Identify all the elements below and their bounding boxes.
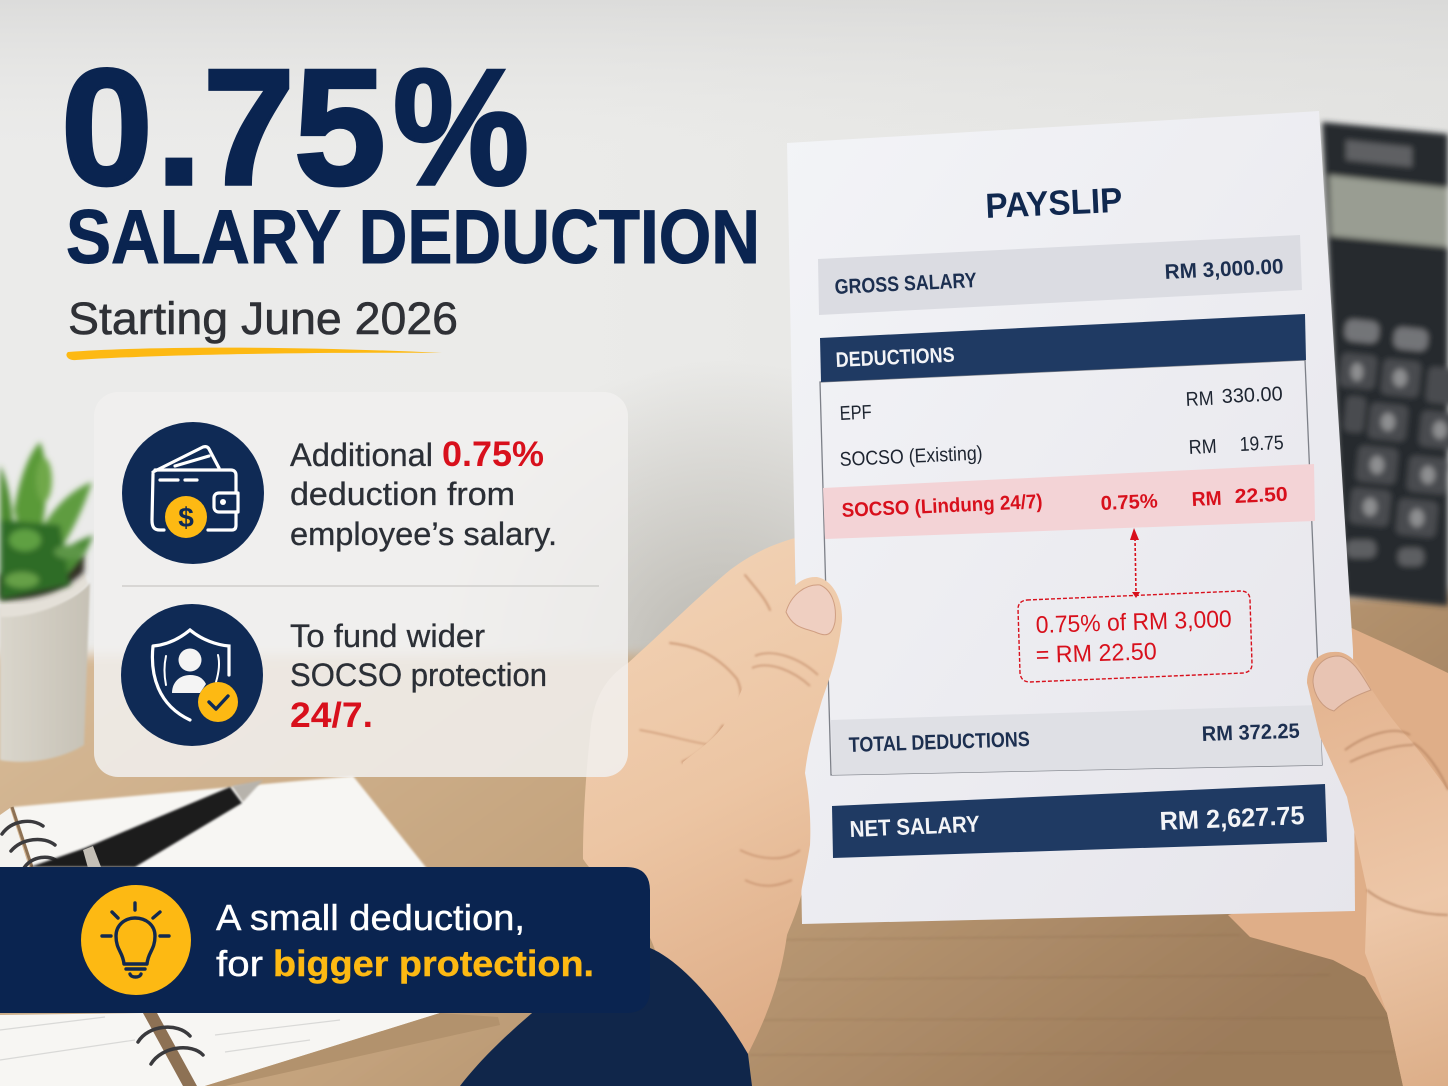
SOCSO Lindung highlighted row: 22.50 [1234,484,1288,508]
text: additional deduction [290,435,557,552]
calculation note: = RM 22.50 [1035,638,1157,669]
SOCSO Lindung highlighted row: RM [1191,488,1222,511]
title: 0.75%: 0 [61,35,153,219]
text: key message: bigger protection. [273,943,594,984]
subheading: starting date: Starting June 2026 [68,293,458,344]
text: fund wider protection [290,618,547,735]
notebook and pen [0,776,500,1086]
icon: light bulb [81,885,191,995]
text: fund wider protection: 24/7. [290,696,373,735]
title: 0.75%: 7 [203,35,295,219]
icon: wallet with dollar coin [122,422,264,564]
plant in pot [0,442,93,762]
right hand behind payslip [1228,625,1448,1086]
net salary row: RM 2,627.75 [1159,800,1305,836]
SOCSO Lindung highlighted row [823,464,1315,539]
payslip title: PAYSLIP [985,181,1123,226]
SOCSO existing row: RM [1188,436,1217,459]
EPF row: EPF [839,402,872,425]
net salary row: NET SALARY [849,811,980,842]
deductions header: DEDUCTIONS [835,344,955,372]
text: additional deduction: Additional [290,437,433,473]
SOCSO Lindung highlighted row: 0.75% [1100,490,1158,515]
EPF row: 330.00 [1221,383,1283,408]
total deductions row: TOTAL DEDUCTIONS [848,728,1030,757]
text: key message: A small deduction, [216,897,525,938]
SOCSO existing row: 19.75 [1239,432,1284,456]
deductions table frame [820,360,1322,775]
EPF row: RM [1185,388,1214,411]
calculation note: 0.75% of RM 3,000 [1035,606,1232,639]
heading: salary deduction: SALARY DEDUCTION [66,195,760,280]
panel background [94,392,628,777]
text: key message [216,897,594,984]
right thumb over payslip [1307,652,1448,1086]
EPF row [839,383,1283,425]
calculation note [1018,591,1252,682]
title: 0.75% [61,35,529,219]
paper sheet [787,111,1355,924]
gross salary row: GROSS SALARY [834,269,977,299]
SOCSO existing row [839,432,1284,471]
gross salary row [818,235,1302,315]
icon: wallet with dollar coin: $ [178,502,194,533]
icon: shield with person and check badge [121,604,263,746]
gross salary row: RM 3,000.00 [1164,255,1284,284]
text: fund wider protection: SOCSO protection [290,657,547,693]
title: 0.75%: 5 [294,35,386,219]
panel: key facts [94,392,628,777]
banner: key message [0,867,650,1013]
deductions header [820,314,1306,382]
text: fund wider protection: To fund wider [290,618,485,654]
SOCSO existing row: SOCSO (Existing) [839,443,983,471]
sleeve [460,948,752,1086]
text: key message: for [216,943,263,984]
payslip [787,111,1355,924]
text: additional deduction: deduction from [290,476,515,512]
left hand behind payslip [583,538,830,1054]
left thumb over payslip [682,577,842,899]
title: 0.75%: . [156,35,202,219]
total deductions row [831,705,1322,775]
total deductions row: RM 372.25 [1201,720,1300,746]
title: 0.75%: % [393,35,529,219]
text: additional deduction: 0.75% [442,435,544,474]
calculator [1322,122,1448,606]
yellow underline [66,348,442,360]
net salary row [832,784,1327,858]
arrow: row to calculation note [1130,528,1140,598]
text: additional deduction: employee’s salary. [290,516,557,552]
SOCSO Lindung highlighted row: SOCSO (Lindung 24/7) [841,491,1043,522]
